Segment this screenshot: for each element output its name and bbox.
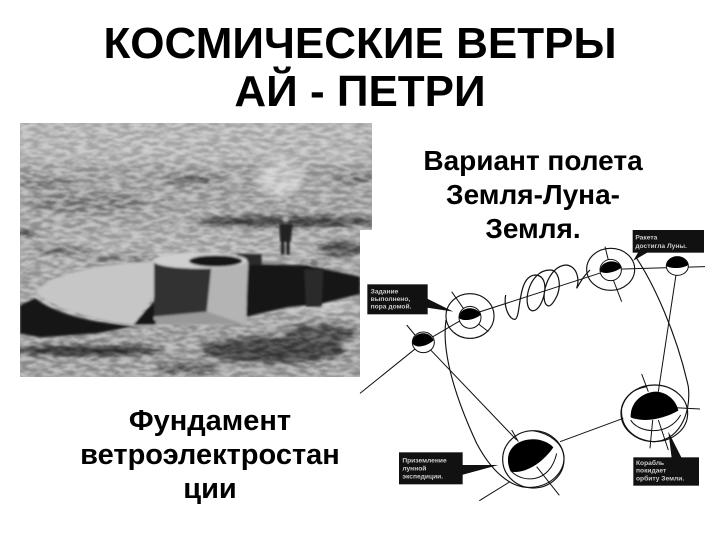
callout: ship leaves Earth orbit: покидает: [636, 468, 667, 475]
callout: ship leaves Earth orbit: Корабль: [636, 459, 664, 467]
low round slab: [37, 262, 154, 325]
tall cylinder: [154, 262, 248, 324]
moon with orbit: task complete: [446, 294, 494, 338]
moon transfer coil: [505, 265, 590, 319]
title: АЙ - ПЕТРИ: [234, 67, 486, 116]
callout: ship leaves Earth orbit: [633, 432, 699, 486]
callout: mission complete: [367, 284, 453, 314]
heading: flight variant: Земля-Луна-: [446, 179, 620, 210]
callout: rocket reached the Moon: достигла Луны.: [635, 243, 687, 250]
callout: mission complete: выполнено,: [371, 296, 410, 303]
heading: flight variant: [423, 145, 643, 244]
title: КОСМИЧЕСКИЕ ВЕТРЫ: [103, 19, 617, 68]
callout: landing of lunar expedition: Приземление: [402, 458, 447, 465]
caption: foundation: ветроэлектростан: [80, 439, 340, 471]
person upper: [279, 216, 293, 255]
caption: foundation: ции: [183, 473, 237, 505]
caption: foundation: Фундамент: [129, 405, 291, 437]
heading: flight variant: Земля.: [485, 213, 581, 244]
moon with orbit: rocket reached moon: [587, 248, 635, 290]
dark ground under slab: [20, 298, 135, 337]
callout: landing of lunar expedition: [399, 452, 498, 484]
callout: rocket reached the Moon: [633, 230, 704, 261]
title: [103, 19, 617, 116]
callout: landing of lunar expedition: экспедиции.: [402, 474, 443, 481]
Earth with orbit: bottom: [503, 431, 564, 488]
trajectory lines: [360, 247, 705, 501]
callout: rocket reached the Moon: Ракета: [635, 234, 658, 241]
callout: ship leaves Earth orbit: орбиту Земли.: [636, 475, 684, 483]
callout: landing of lunar expedition: лунной: [402, 465, 426, 473]
diagram: Earth-Moon-Earth flight path: [360, 230, 705, 501]
left moon: [412, 332, 434, 353]
heading: flight variant: Вариант полета: [423, 145, 643, 176]
dark ground right of tank: [247, 264, 360, 317]
caption: foundation: [80, 405, 340, 505]
callout: mission complete: пора домой.: [371, 303, 412, 311]
right moon: [666, 257, 688, 275]
Earth with orbit: right: [621, 385, 688, 442]
person lower: [304, 260, 323, 307]
photo: wind power station foundation: [7, 120, 377, 377]
callout: mission complete: Задание: [371, 288, 399, 295]
